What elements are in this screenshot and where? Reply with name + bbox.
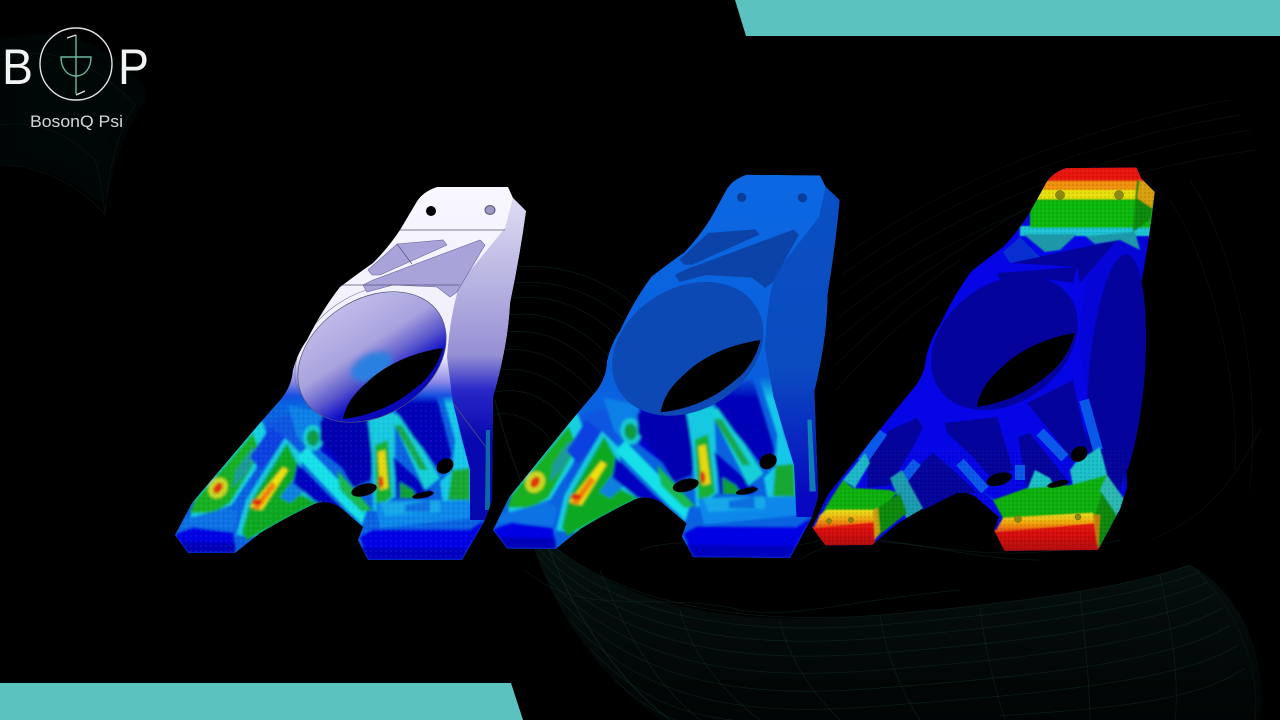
bracket 2 side highlight xyxy=(806,420,816,492)
bracket 2 side face xyxy=(765,187,840,518)
bracket 2 through holes xyxy=(657,339,781,497)
logo: BosonQ Psi xyxy=(2,28,149,131)
bracket 3 top bands xyxy=(1019,168,1155,253)
bracket 1 mesh speckle xyxy=(170,405,475,560)
bracket 1 stress patch xyxy=(348,348,395,385)
background mesh: upper right arc xyxy=(836,100,1260,720)
background mesh: top left corner xyxy=(0,34,150,215)
bracket 3 through holes xyxy=(975,333,1091,490)
bracket 1 through holes xyxy=(343,348,456,500)
bracket 1: white model with partial stress xyxy=(175,187,526,560)
bracket 1 pocket rim line xyxy=(294,290,366,392)
logo wordmark: BosonQ Psi xyxy=(30,112,123,131)
bracket 2 pockets xyxy=(673,229,801,288)
bracket 3 colour bands xyxy=(805,165,1170,556)
bracket 1 side highlight xyxy=(485,430,490,510)
logo letter P: P xyxy=(118,39,149,95)
bracket 2: blue model with smooth stress xyxy=(493,174,840,558)
bracket 3 blue ribs xyxy=(862,400,1098,490)
bracket 1 front face xyxy=(278,187,526,404)
logo letter B: B xyxy=(2,39,33,95)
background mesh: lower swirl xyxy=(495,400,1262,720)
bracket 3 left foot xyxy=(812,453,925,550)
bracket 1 pockets xyxy=(363,240,485,297)
bracket 1 side face xyxy=(447,198,526,520)
bottom teal bar xyxy=(0,683,523,720)
bracket 2 round pocket xyxy=(612,282,764,416)
bracket 3: displacement colour bands xyxy=(805,165,1170,556)
bracket 1 edge lines xyxy=(340,230,505,450)
bracket 3 web pockets xyxy=(867,237,1117,510)
top teal bar xyxy=(735,0,1280,36)
bracket 2 front face xyxy=(594,174,840,397)
bracket 2 mounting holes xyxy=(737,193,807,202)
background mesh: contour rings xyxy=(492,266,1120,613)
logo circle emblem xyxy=(40,28,112,100)
bracket 1 mounting holes xyxy=(426,206,495,216)
bracket 3 base geometry xyxy=(805,167,1162,553)
bracket 3 mesh texture xyxy=(1016,168,1154,233)
bracket 3 right foot xyxy=(978,447,1127,556)
bracket 3 mounting holes xyxy=(826,190,1124,524)
bracket 1 round pocket xyxy=(298,291,446,423)
